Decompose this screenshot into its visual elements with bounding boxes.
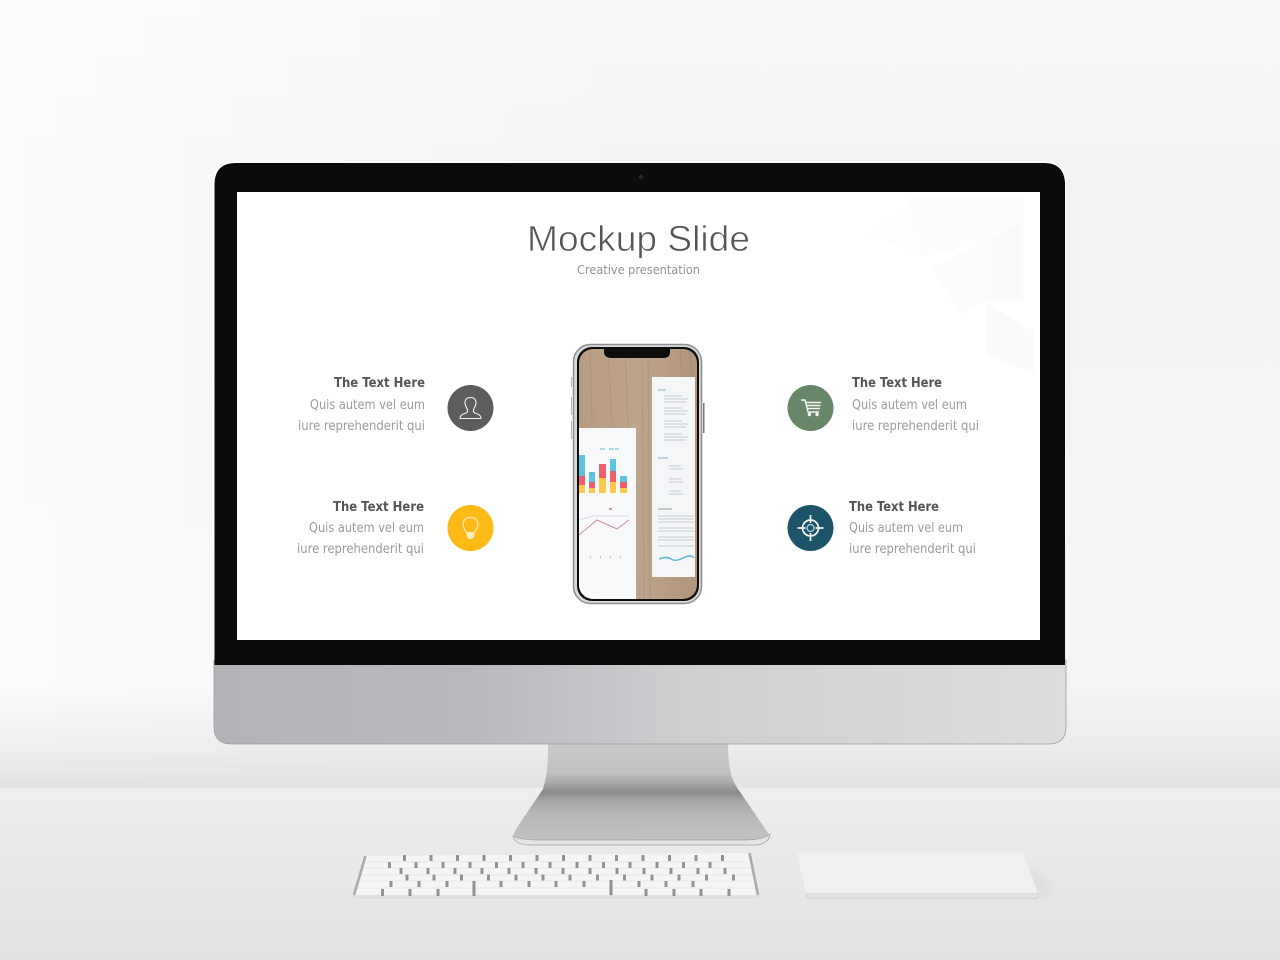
- document text lines: [658, 390, 694, 560]
- icon: target: [788, 505, 834, 551]
- text block: bottom left: The Text Here: [333, 499, 424, 515]
- text block: top right: iure reprehenderit qui: [852, 419, 979, 434]
- phone volume buttons: [570, 377, 572, 439]
- subtitle: Creative presentation: [577, 263, 700, 277]
- document paper: [652, 377, 695, 577]
- trackpad: [797, 852, 1038, 898]
- text block: top right: [852, 375, 979, 434]
- monitor: [212, 161, 1066, 744]
- phone black edge: [577, 347, 699, 601]
- wall shading above desk: [0, 685, 1280, 789]
- phone side button: [703, 403, 704, 433]
- phone screen photo: [579, 349, 697, 599]
- phone body: [574, 344, 702, 604]
- text block: bottom right: The Text Here: [849, 499, 939, 515]
- monitor black bezel: [214, 163, 1065, 665]
- monitor chin: [214, 660, 1066, 744]
- text block: bottom left: iure reprehenderit qui: [297, 542, 424, 557]
- text block: top left: Quis autem vel eum: [310, 398, 425, 413]
- chart paper: [579, 428, 636, 599]
- line chart: [579, 449, 629, 557]
- text block: bottom right: [849, 499, 976, 557]
- text block: bottom left: Quis autem vel eum: [309, 521, 424, 536]
- icon: person: [448, 385, 494, 431]
- stacked bar chart: [579, 455, 627, 493]
- text block: top left: iure reprehenderit qui: [298, 419, 425, 434]
- text block: bottom right: iure reprehenderit qui: [849, 542, 976, 557]
- monitor outline glow: [212, 161, 1066, 561]
- desk surface: [0, 788, 1280, 960]
- phone mockup: [572, 344, 704, 604]
- text block: top right: The Text Here: [852, 375, 942, 391]
- wall left glow: [0, 0, 640, 790]
- text block: top right: Quis autem vel eum: [852, 398, 967, 413]
- keyboard: [353, 853, 758, 900]
- text block: top left: The Text Here: [334, 375, 425, 391]
- webcam: [639, 175, 643, 179]
- decorative polygons in slide corner: [865, 198, 1034, 374]
- icon: light bulb: [448, 505, 494, 551]
- phone notch: [604, 349, 670, 358]
- trackpad cast shadow: [1022, 862, 1050, 898]
- keyboard edges: [354, 853, 758, 895]
- title: Mockup Slide: [527, 218, 750, 259]
- monitor stand: [513, 744, 770, 845]
- text block: bottom left: [297, 499, 424, 557]
- keyboard key gaps: [382, 855, 734, 896]
- icon: shopping cart: [788, 385, 834, 431]
- slide screen: [237, 192, 1040, 640]
- text block: bottom right: Quis autem vel eum: [849, 521, 963, 536]
- text block: top left: [298, 375, 425, 434]
